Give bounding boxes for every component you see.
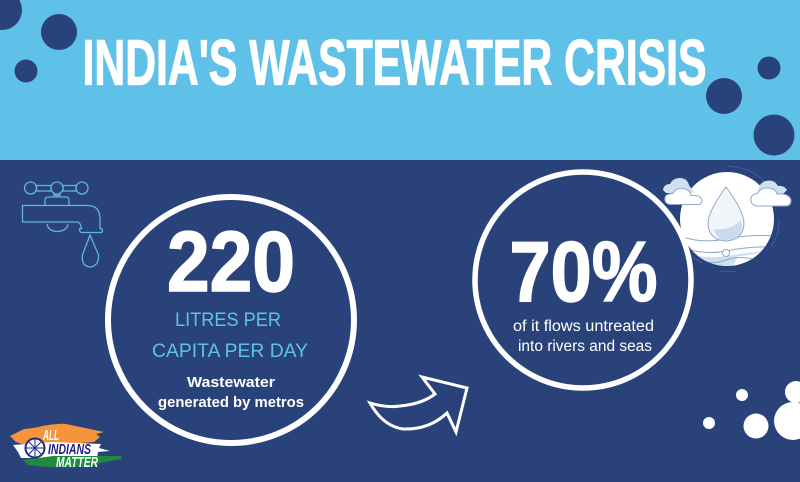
icon: water drop globe	[663, 166, 791, 280]
bubbles	[703, 381, 800, 440]
stat caption: generated by metros	[158, 394, 304, 411]
logo wheel	[26, 438, 44, 458]
logo: All Indians Matter: ALL	[42, 427, 59, 444]
icon: water tap	[22, 182, 102, 267]
logo: All Indians Matter	[10, 424, 122, 471]
stat caption: Wastewater	[187, 374, 275, 391]
header band	[0, 0, 800, 160]
stat number: 70%: 70%	[510, 225, 658, 320]
logo: All Indians Matter: INDIANS	[48, 441, 91, 458]
stat unit: CAPITA PER DAY	[152, 340, 308, 362]
stat number: 220: 220	[167, 215, 295, 310]
logo: All Indians Matter: MATTER	[56, 454, 98, 471]
arrow	[370, 377, 467, 432]
stat unit: LITRES PER	[175, 309, 281, 331]
header dots	[0, 0, 794, 156]
stat circle: 70%	[475, 172, 691, 388]
stat caption: into rivers and seas	[518, 338, 652, 355]
stat unit	[152, 309, 308, 362]
stat caption	[513, 318, 654, 355]
stat caption	[158, 374, 304, 411]
stat caption: of it flows untreated	[513, 318, 654, 335]
lower panel background	[0, 160, 800, 482]
stat circle: 220 litres	[108, 197, 354, 443]
